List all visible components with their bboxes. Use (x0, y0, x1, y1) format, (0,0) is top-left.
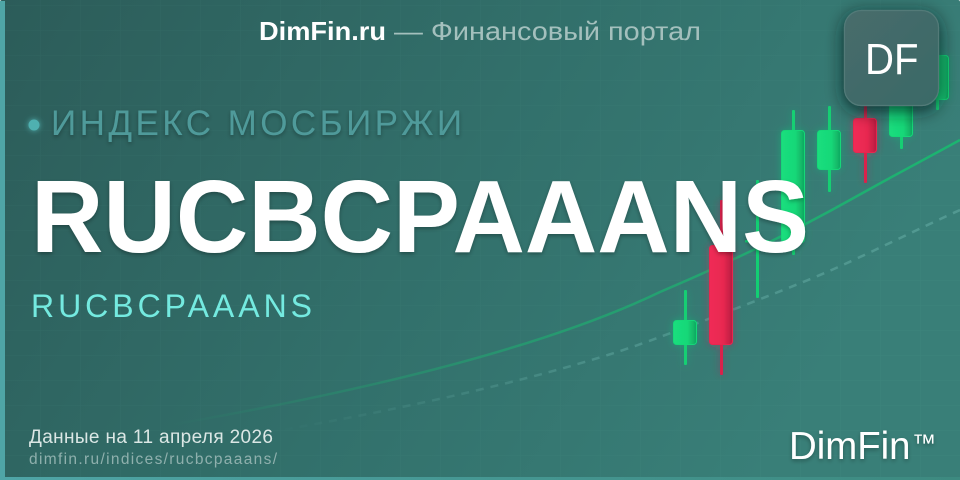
header text: DimFin.ru (259, 16, 386, 46)
candle 2 red (710, 200, 732, 375)
eyebrow: indicator dot and label: ИНДЕКС МОСБИРЖИ (51, 104, 462, 143)
candle 7 green (890, 85, 912, 149)
subtitle: RUCBCPAAANS (31, 288, 312, 324)
brand wordmark: ™ (912, 430, 936, 457)
candle 1 green (674, 290, 696, 365)
trend line: solid (170, 140, 960, 425)
frame border left (0, 1, 5, 478)
candle 8 green (926, 40, 948, 110)
header text (259, 16, 701, 46)
header text: — Финансовый портал (394, 16, 701, 46)
logo badge: DF (865, 35, 918, 84)
main title: RUCBCPAAANS (31, 159, 809, 274)
candle 6 red (854, 95, 876, 183)
date text: Данные на 11 апреля 2026 (29, 427, 273, 448)
candlestick chart (674, 40, 948, 375)
candle 5 green (818, 106, 840, 192)
url text: dimfin.ru/indices/rucbcpaaans/ (29, 451, 278, 468)
brand wordmark: DimFin (789, 425, 910, 468)
logo badge (844, 10, 938, 106)
candle 4 green (782, 110, 804, 255)
trend line: dashed (270, 210, 960, 432)
candle 3 doji green (745, 180, 769, 298)
frame border bottom (0, 477, 960, 480)
